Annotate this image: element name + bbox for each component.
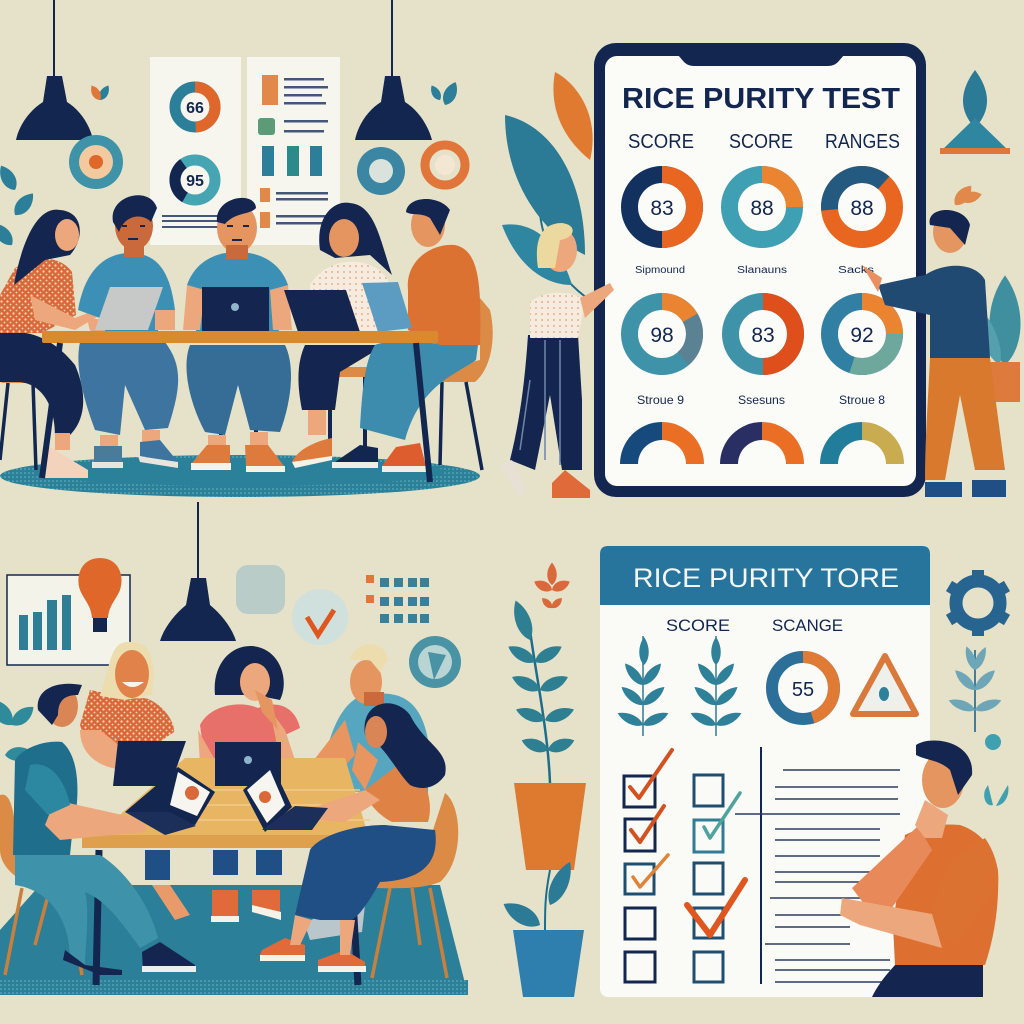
column headings: SCORE <box>628 131 694 153</box>
right woman in orange top <box>260 703 446 972</box>
donut 83: 83 <box>650 197 674 220</box>
warning triangle <box>853 656 916 714</box>
faded fern <box>947 645 1003 732</box>
round wall icon <box>409 636 461 688</box>
pendant lamp <box>160 502 236 641</box>
column headings: RANGES <box>825 131 900 153</box>
panel: checklist score card (bottom right) <box>499 546 1008 997</box>
row 1 captions: Slanauns <box>737 265 787 276</box>
donut 92 <box>830 302 894 366</box>
donut 88 teal: 88 <box>750 197 774 220</box>
tablet title: RICE PURITY TEST <box>622 83 900 115</box>
center woman in pink <box>198 646 300 765</box>
donut 83 <box>630 174 694 240</box>
wooden table <box>82 758 372 985</box>
person 4: woman in white lace top <box>292 203 392 468</box>
row 2 captions: Ssesuns <box>738 393 785 407</box>
wall poster: score donuts <box>150 57 241 245</box>
decorative plants right <box>940 70 1021 402</box>
donut 98: 98 <box>650 324 674 347</box>
donut 88 orange: 88 <box>850 197 874 220</box>
donut 55 <box>772 657 834 719</box>
wall poster: list <box>247 57 340 245</box>
fern icons <box>616 636 743 736</box>
spare shoes under table <box>305 895 365 940</box>
text lines <box>735 770 900 982</box>
person 2: man in blue tee <box>78 195 178 468</box>
gauge row <box>620 422 904 464</box>
card headings: SCORE <box>666 616 730 635</box>
large plant left of tablet <box>502 72 593 300</box>
panel: team at long table (top left) <box>0 0 493 497</box>
check badge <box>292 589 348 645</box>
card <box>600 546 930 997</box>
gear icon <box>949 570 1007 636</box>
chairs <box>0 793 458 978</box>
panel: team around laptop table (bottom left) <box>0 502 468 995</box>
wall grid icons <box>366 575 429 623</box>
wall badges <box>69 135 465 195</box>
row 2 captions: Stroue 8 <box>839 393 885 407</box>
card header <box>600 546 930 605</box>
long table <box>42 331 438 482</box>
stipple badge <box>236 565 285 614</box>
wall chart with lightbulb <box>7 558 130 665</box>
thinking man in orange sweater <box>840 740 998 997</box>
donut 98 <box>618 290 706 378</box>
donut 83 red: 83 <box>751 324 775 347</box>
left man in teal tee <box>13 684 196 975</box>
open laptops and papers <box>95 282 412 333</box>
row 2 captions <box>637 393 885 407</box>
row 1 captions: Sacks <box>838 265 874 276</box>
card headings <box>666 616 843 635</box>
check marks <box>630 750 745 935</box>
card title: RICE PURITY TORE <box>633 563 899 593</box>
wall poster: score donuts: 95 <box>186 173 204 190</box>
blonde woman <box>80 642 282 922</box>
orange flower sprig <box>532 563 572 610</box>
potted plant <box>505 598 586 870</box>
panel: tablet with score ranges (top right) <box>500 43 1021 498</box>
blond man <box>298 644 428 795</box>
person 1: woman in speckled top <box>0 210 108 478</box>
donut 83 red <box>730 302 796 366</box>
checkbox column 1 <box>624 776 655 982</box>
row 1 captions <box>635 265 874 276</box>
row 1 captions: Sipmound <box>635 265 685 276</box>
column headings <box>628 131 900 153</box>
tablet frame <box>594 43 926 497</box>
rug <box>0 455 480 497</box>
rear laptops <box>113 741 281 786</box>
donut 88 teal <box>730 174 794 240</box>
man pointing at tablet <box>862 210 1006 497</box>
divider line <box>760 747 762 984</box>
column headings: SCORE <box>729 131 793 153</box>
donut 55: 55 <box>792 679 814 701</box>
wall plant <box>0 694 38 762</box>
rug <box>0 885 468 995</box>
card headings: SCANGE <box>772 616 843 635</box>
small teal drops <box>984 734 1008 806</box>
donut 88 orange <box>827 172 897 242</box>
checkbox column 2 <box>694 775 723 982</box>
front open laptops <box>125 765 328 835</box>
pendant lamps <box>16 0 432 140</box>
wall plants <box>0 80 461 249</box>
donut 92: 92 <box>850 324 874 347</box>
person 5: man in orange sweater <box>332 199 480 472</box>
chairs <box>0 298 493 470</box>
person 3: man in blue tee with laptop <box>183 198 292 472</box>
row 2 captions: Stroue 9 <box>637 393 684 407</box>
woman presenting <box>500 223 614 498</box>
small potted plant <box>499 858 584 997</box>
wall poster: score donuts: 66 <box>186 100 204 117</box>
